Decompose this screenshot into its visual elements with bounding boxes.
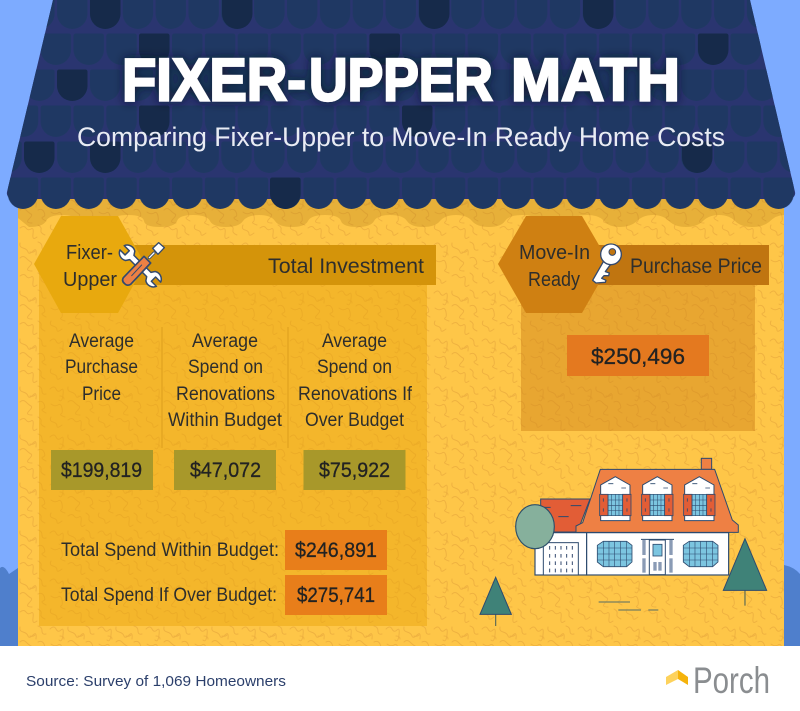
column: renovations over budget: Average xyxy=(322,331,387,352)
column: renovations within budget: Spend on xyxy=(188,357,263,378)
roof shingles xyxy=(0,0,800,210)
logo: porch xyxy=(666,660,770,701)
value: over budget: $75,922 xyxy=(319,459,390,482)
garage xyxy=(535,499,590,575)
total over budget: Total Spend If Over Budget: xyxy=(61,585,277,606)
total over budget xyxy=(61,575,387,615)
ground lines xyxy=(599,602,658,610)
value: purchase price: $199,819 xyxy=(61,459,142,482)
band heading: Purchase Price xyxy=(630,255,762,278)
column divider xyxy=(162,327,288,448)
column: average purchase price: Purchase xyxy=(65,357,138,378)
column: renovations over budget: Over Budget xyxy=(305,410,405,431)
value: purchase price: $250,496 xyxy=(591,344,685,369)
column: renovations within budget: Within Budget xyxy=(168,410,283,431)
column: average purchase price xyxy=(65,331,138,405)
total within budget: Total Spend Within Budget: xyxy=(61,540,279,561)
panel: move-in ready xyxy=(498,216,769,431)
icon: wrench and screwdriver xyxy=(117,242,164,290)
purchase price band xyxy=(590,245,769,285)
column: renovations within budget: Average xyxy=(192,331,258,352)
column: renovations over budget: Spend on xyxy=(317,357,392,378)
value: within budget xyxy=(174,450,276,490)
column: renovations over budget: Renovations If xyxy=(298,384,413,405)
column: renovations over budget xyxy=(298,331,413,431)
value: within budget: $47,072 xyxy=(190,459,261,482)
band heading: Total Investment xyxy=(268,255,424,278)
hexagon xyxy=(34,216,145,313)
column: renovations within budget xyxy=(168,331,283,431)
column: average purchase price: Average xyxy=(69,331,134,352)
panel background xyxy=(39,265,427,626)
title: FIXER- xyxy=(122,46,306,114)
hills xyxy=(0,565,800,646)
hexagon label xyxy=(63,242,117,291)
illustration: house xyxy=(480,458,767,626)
total over budget: $275,741 xyxy=(297,584,375,607)
footer xyxy=(0,646,800,711)
icon: key xyxy=(593,244,621,283)
hexagon label: Fixer- xyxy=(66,242,113,264)
value: purchase price xyxy=(567,335,709,376)
panel: fixer-upper xyxy=(34,216,436,626)
total within budget xyxy=(61,530,387,570)
title: MATH xyxy=(511,46,680,114)
total investment band xyxy=(130,245,436,285)
hexagon label xyxy=(519,242,590,291)
main house xyxy=(576,458,738,575)
total within budget: $246,891 xyxy=(295,539,377,562)
logo: porch: Porch xyxy=(693,660,770,701)
column: average purchase price: Price xyxy=(82,384,121,405)
title: UPPER xyxy=(309,46,493,114)
left pine tree xyxy=(480,577,511,626)
hexagon xyxy=(498,216,610,313)
round tree xyxy=(516,505,554,549)
hexagon label: Move-In xyxy=(519,242,590,264)
source: Source: Survey of 1,069 Homeowners xyxy=(26,673,286,690)
column: renovations within budget: Renovations xyxy=(176,384,275,405)
hexagon label: Upper xyxy=(63,269,117,291)
right pine tree xyxy=(723,539,767,606)
hexagon label: Ready xyxy=(528,269,580,291)
value: purchase price xyxy=(51,450,153,490)
value: over budget xyxy=(304,450,406,490)
roof xyxy=(0,0,800,210)
roof shadow on wall xyxy=(18,190,784,227)
panel background xyxy=(521,265,755,431)
house wall xyxy=(18,190,784,646)
subtitle: Comparing Fixer-Upper to Move-In Ready Home Costs xyxy=(77,122,725,152)
